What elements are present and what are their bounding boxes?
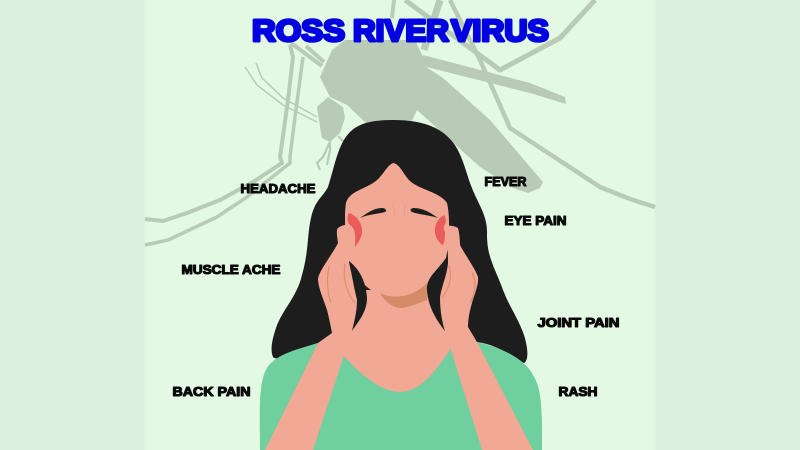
side hair left — [345, 261, 367, 331]
title — [252, 13, 549, 48]
label: eye pain: EYE PAIN — [504, 214, 566, 228]
right arm and hand — [440, 226, 533, 450]
label: headache: HEADACHE — [240, 182, 316, 196]
label: back pain: BACK PAIN — [172, 385, 250, 399]
hair — [272, 120, 527, 363]
label: rash: RASH — [558, 385, 598, 399]
chin shadow — [380, 283, 427, 308]
face — [345, 163, 449, 296]
eyebrow right — [411, 208, 438, 218]
side hair right — [427, 258, 452, 331]
shirt — [260, 342, 542, 450]
title: RIVER — [353, 13, 449, 48]
mosquito silhouette — [145, 0, 655, 245]
nose lines — [392, 205, 406, 215]
label: fever: FEVER — [484, 175, 526, 189]
title: VIRUS — [451, 14, 549, 48]
label: muscle ache: MUSCLE ACHE — [182, 263, 280, 277]
woman illustration — [260, 120, 542, 450]
label: joint pain: JOINT PAIN — [538, 316, 620, 330]
temple pain right — [435, 215, 446, 245]
eyebrow left — [360, 208, 386, 218]
left arm and hand — [265, 225, 357, 450]
temple pain left — [348, 213, 362, 247]
background panel — [145, 0, 655, 450]
neck — [343, 290, 450, 392]
title: ROSS — [252, 13, 345, 48]
finger lines — [328, 264, 475, 303]
